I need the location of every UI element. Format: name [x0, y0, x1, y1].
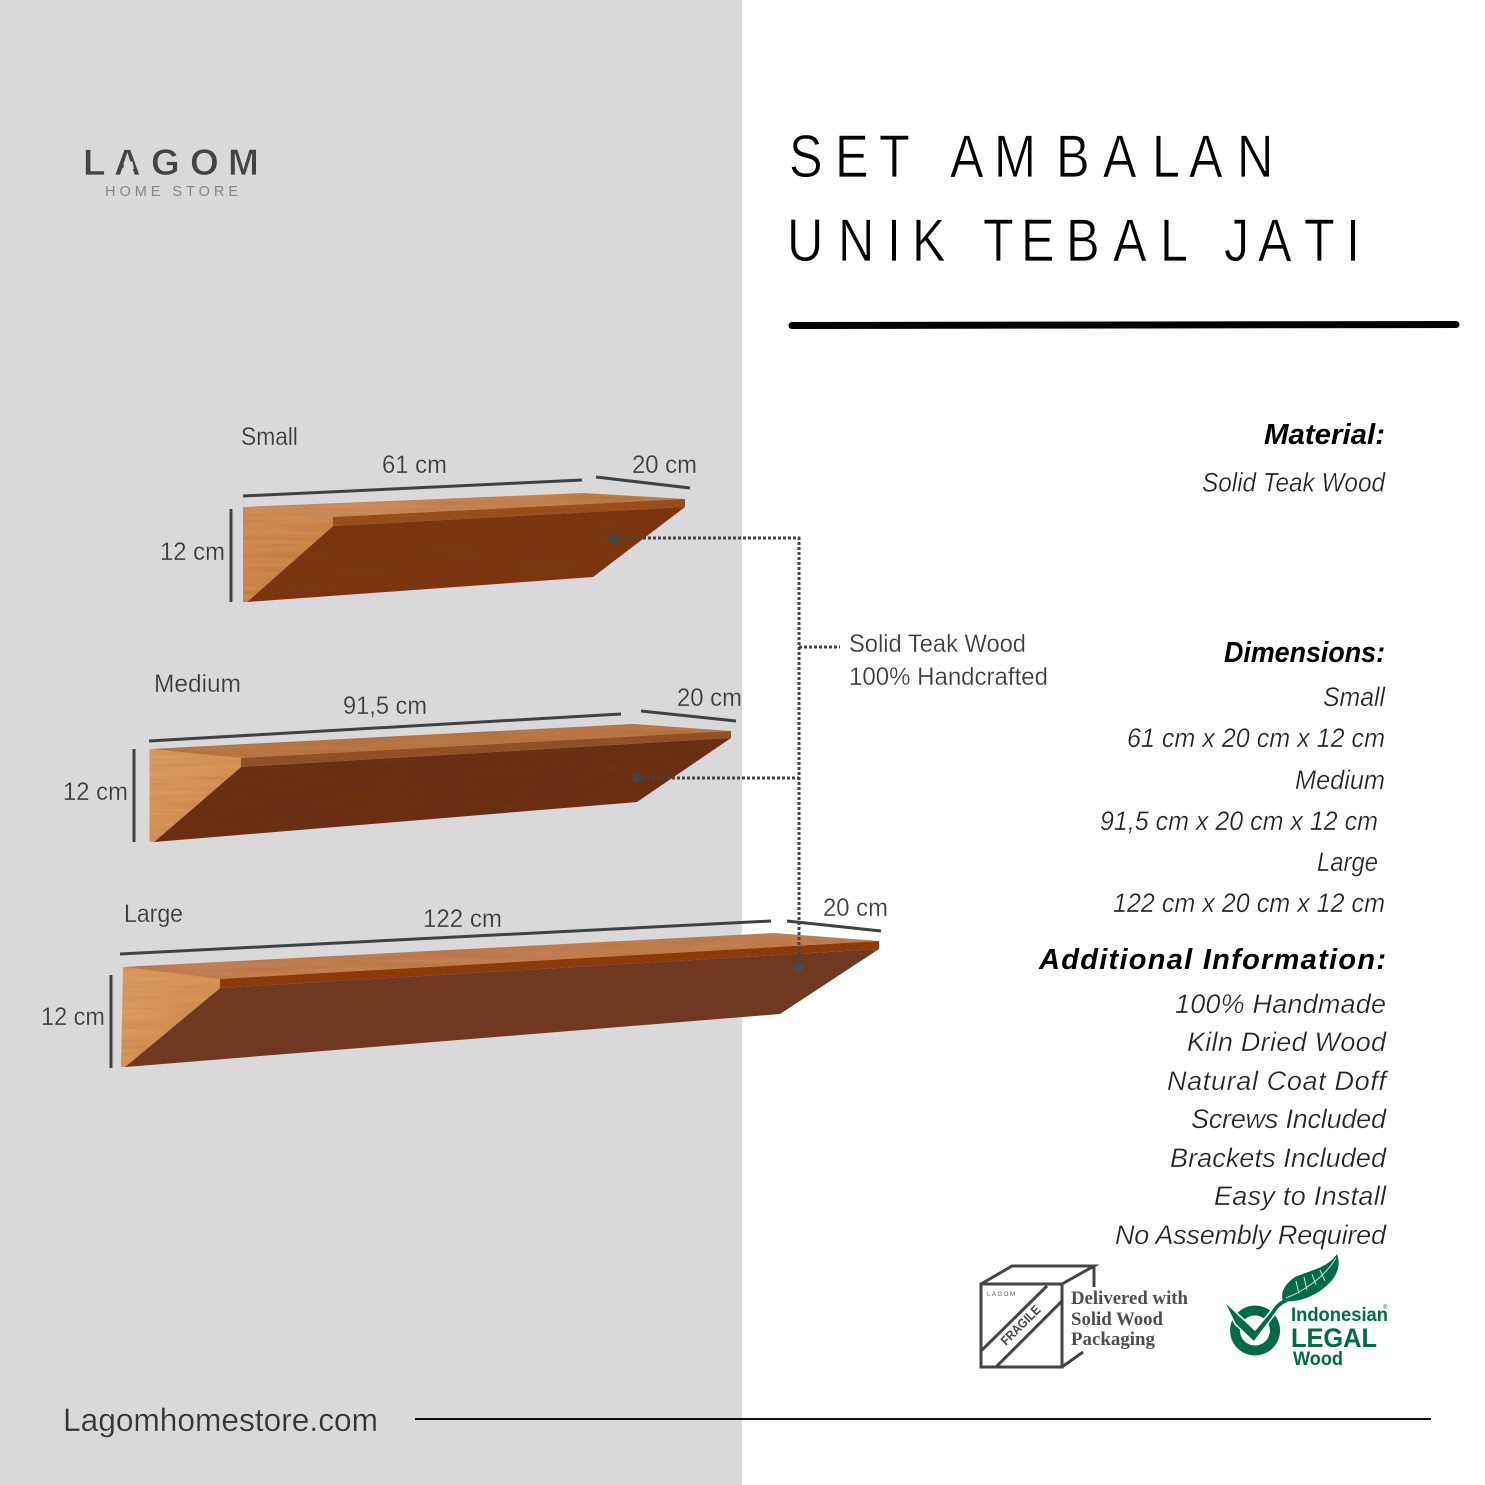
labels: large shelf: 20 cm — [823, 894, 888, 922]
text block: dimensions: Large — [1317, 847, 1378, 877]
text block: additional information: Screws Included — [1191, 1104, 1387, 1134]
icon: fragile box with packaging note: LAGOM — [987, 1292, 1015, 1298]
icon: fragile box with packaging note: FRAGILE — [998, 1302, 1044, 1348]
icon: fragile box with packaging note: Delivered with — [1071, 1289, 1189, 1309]
text block: additional information: Additional Information: — [1038, 944, 1386, 976]
icon: Indonesian Legal Wood badge — [1224, 1254, 1388, 1370]
text block: dimensions: 122 cm x 20 cm x 12 cm — [1113, 888, 1385, 918]
labels: large shelf: Large — [124, 900, 183, 928]
shelf: medium — [149, 720, 734, 845]
title underline — [792, 324, 1456, 326]
text block: additional information: No Assembly Required — [1115, 1220, 1387, 1250]
dimension lines: medium — [134, 711, 736, 842]
icon: fragile box with packaging note: Packaging — [1071, 1330, 1156, 1350]
callout: wood note: 100% Handcrafted — [849, 663, 1048, 691]
labels: medium shelf: 20 cm — [677, 684, 742, 712]
labels: large shelf: 122 cm — [423, 905, 502, 933]
labels: large shelf — [41, 894, 888, 1031]
text block: dimensions: 61 cm x 20 cm x 12 cm — [1127, 723, 1385, 753]
labels: small shelf: 20 cm — [632, 451, 697, 479]
text block: additional information — [1038, 944, 1388, 1250]
dimension lines: small — [231, 477, 690, 602]
icon: Indonesian Legal Wood badge: LEGAL — [1291, 1323, 1377, 1353]
title: UNIK TEBAL JATI — [787, 207, 1360, 274]
shelf: large — [120, 930, 882, 1070]
labels: medium shelf: Medium — [154, 670, 241, 698]
labels: large shelf: 12 cm — [41, 1003, 105, 1031]
text block: additional information: Easy to Install — [1214, 1181, 1387, 1211]
text block: additional information: Natural Coat Doff — [1167, 1066, 1388, 1096]
title — [787, 123, 1360, 274]
logo: Lagom Home Store: LAGOM — [83, 142, 259, 183]
text block: dimensions: Small — [1323, 682, 1386, 712]
labels: small shelf: 12 cm — [160, 538, 225, 566]
labels: medium shelf: 12 cm — [63, 778, 128, 806]
footer rule — [415, 1418, 1431, 1420]
icon: fragile box with packaging note: Solid Wood — [1071, 1310, 1164, 1330]
callout: wood note: Solid Teak Wood — [849, 630, 1026, 658]
text block: dimensions: Dimensions: — [1224, 637, 1385, 669]
labels: small shelf: 61 cm — [382, 451, 447, 479]
icon: Indonesian Legal Wood badge: Wood — [1293, 1349, 1343, 1370]
dimension lines: large — [111, 921, 881, 1068]
shelf: small — [243, 490, 688, 605]
text block: material — [1202, 419, 1386, 498]
labels: small shelf — [160, 423, 697, 566]
labels: small shelf: Small — [241, 423, 298, 451]
panel: grey left background — [0, 0, 742, 1485]
icon: fragile box with packaging note — [981, 1266, 1189, 1367]
labels: medium shelf — [63, 670, 742, 806]
text block: material: Material: — [1264, 419, 1385, 451]
text block: dimensions: 91,5 cm x 20 cm x 12 cm — [1100, 806, 1378, 836]
text block: dimensions — [1100, 637, 1386, 918]
dotted material connector — [608, 533, 840, 973]
icon: Indonesian Legal Wood badge: Indonesian — [1291, 1305, 1388, 1326]
labels: medium shelf: 91,5 cm — [343, 692, 427, 720]
text block: dimensions: Medium — [1295, 765, 1385, 795]
logo: Lagom Home Store: HOME STORE — [105, 184, 238, 200]
text block: material: Solid Teak Wood — [1202, 468, 1386, 498]
callout: wood note — [849, 630, 1048, 691]
title: SET AMBALAN — [789, 123, 1273, 190]
icon: Indonesian Legal Wood badge: ® — [1383, 1304, 1388, 1311]
text block: additional information: 100% Handmade — [1175, 989, 1386, 1019]
website footer: Lagomhomestore.com — [63, 1402, 378, 1438]
text block: additional information: Kiln Dried Wood — [1187, 1027, 1387, 1057]
text block: additional information: Brackets Included — [1170, 1143, 1387, 1173]
